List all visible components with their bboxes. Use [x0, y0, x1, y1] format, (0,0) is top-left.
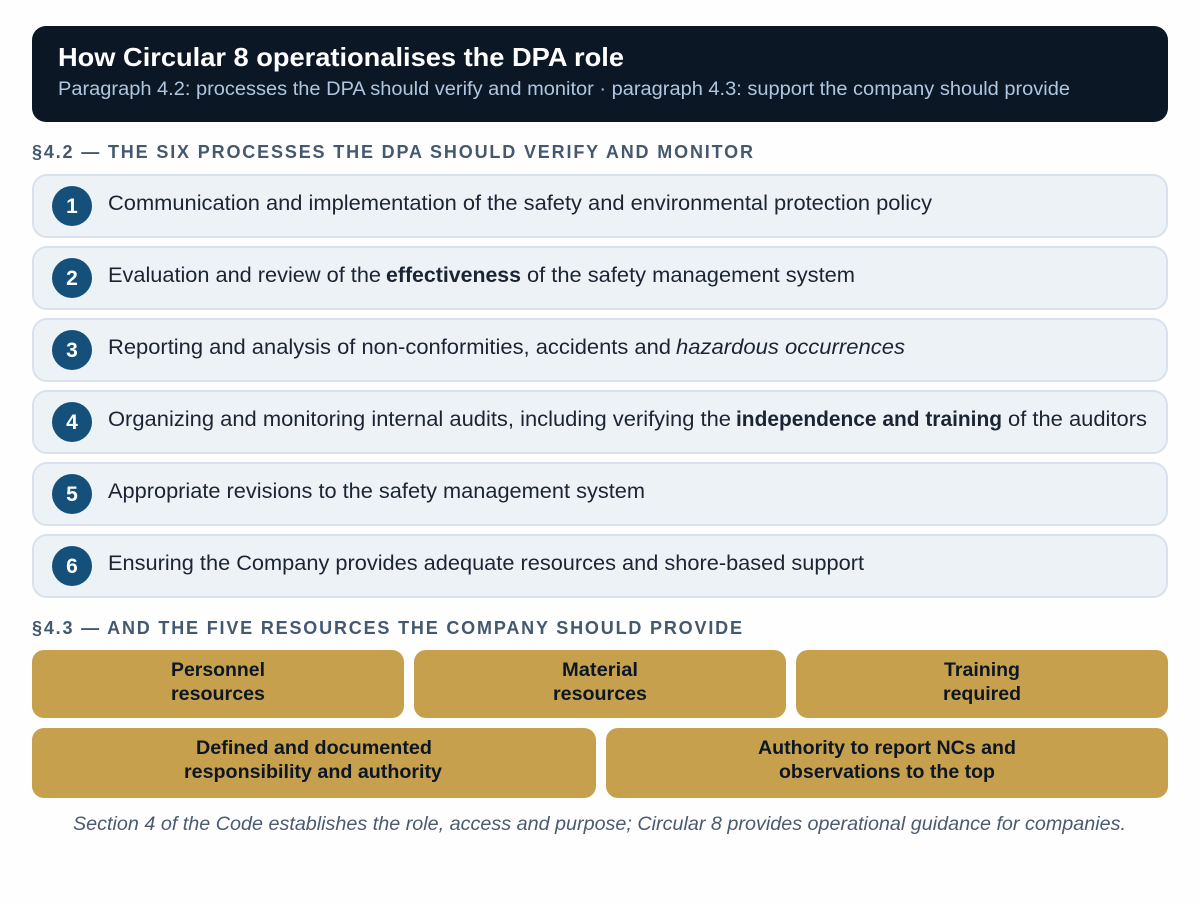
process 4 — [33, 391, 1167, 453]
process 5: 5 — [66, 483, 78, 506]
process 2: of the safety management system — [527, 264, 855, 287]
process 4: of the auditors — [1008, 408, 1147, 431]
resource: personnel: Personnel — [171, 660, 265, 681]
header banner — [32, 26, 1168, 122]
resource: personnel — [32, 650, 404, 718]
resource: material — [414, 650, 786, 718]
resource: authority to report: observations to the top — [779, 762, 995, 783]
title: How Circular 8 operationalises the DPA role — [58, 42, 624, 72]
resource: responsibility and authority: responsibility and authority — [184, 762, 442, 783]
process 6 — [33, 535, 1167, 597]
resource: authority to report: Authority to report NCs and — [758, 738, 1016, 759]
process 5 — [33, 463, 1167, 525]
process 2: 2 — [66, 267, 78, 290]
resource: responsibility and authority — [32, 728, 596, 798]
process 3: hazardous occurrences — [676, 336, 906, 359]
panel: six processes — [33, 175, 1167, 597]
process 2: effectiveness — [386, 264, 521, 287]
process 3: Reporting and analysis of non-conformities, accidents and — [108, 336, 671, 359]
panel: five resources — [32, 650, 1168, 798]
resource: personnel: resources — [171, 684, 265, 705]
process 4: 4 — [66, 411, 78, 434]
process 1 — [33, 175, 1167, 237]
resource: training — [796, 650, 1168, 718]
process 3: 3 — [66, 339, 78, 362]
process 4: Organizing and monitoring internal audits, including verifying the — [108, 408, 731, 431]
process 6: 6 — [66, 555, 78, 578]
resource: training: required — [943, 684, 1021, 705]
process 2 — [33, 247, 1167, 309]
resource: training: Training — [944, 660, 1020, 681]
subtitle: Paragraph 4.2: processes the DPA should verify and monitor · paragraph 4.3: support the company should provide — [58, 79, 1070, 100]
process 1: Communication and implementation of the safety and environmental protection policy — [108, 192, 933, 215]
process 3 — [33, 319, 1167, 381]
section heading: section 4.2: §4.2 — THE SIX PROCESSES THE DPA SHOULD VERIFY AND MONITOR — [32, 142, 753, 162]
resource: material: Material — [562, 660, 638, 681]
resource: material: resources — [553, 684, 647, 705]
footnote: Section 4 of the Code establishes the role, access and purpose; Circular 8 provides operational guidance for companies. — [73, 814, 1126, 835]
section heading: section 4.3: §4.3 — AND THE FIVE RESOURCES THE COMPANY SHOULD PROVIDE — [32, 618, 742, 638]
process 1: 1 — [66, 195, 78, 218]
resource: responsibility and authority: Defined and documented — [196, 738, 432, 759]
resource: authority to report — [606, 728, 1168, 798]
process 6: Ensuring the Company provides adequate resources and shore-based support — [108, 552, 864, 575]
process 4: independence and training — [736, 408, 1002, 431]
process 2: Evaluation and review of the — [108, 264, 381, 287]
process 5: Appropriate revisions to the safety management system — [108, 480, 645, 503]
